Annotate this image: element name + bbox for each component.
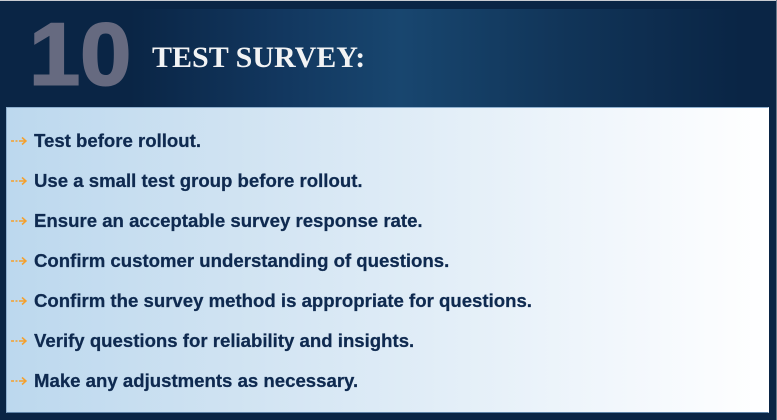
item 5: Confirm the survey method is appropriate for questions. (34, 290, 532, 311)
right edge line (776, 0, 777, 420)
item 1: Test before rollout. (34, 130, 201, 151)
item 4: Confirm customer understanding of questions. (34, 250, 449, 271)
section number: 10 (29, 6, 131, 104)
top edge line (0, 0, 777, 1)
header band (0, 1, 776, 107)
item 3: Ensure an acceptable survey response rate. (34, 210, 423, 231)
item 2: Use a small test group before rollout. (34, 170, 363, 191)
item 7: Make any adjustments as necessary. (34, 370, 358, 391)
item 6: Verify questions for reliability and insights. (34, 330, 414, 351)
title: TEST SURVEY: (152, 41, 365, 74)
panel: checklist (6, 107, 769, 413)
